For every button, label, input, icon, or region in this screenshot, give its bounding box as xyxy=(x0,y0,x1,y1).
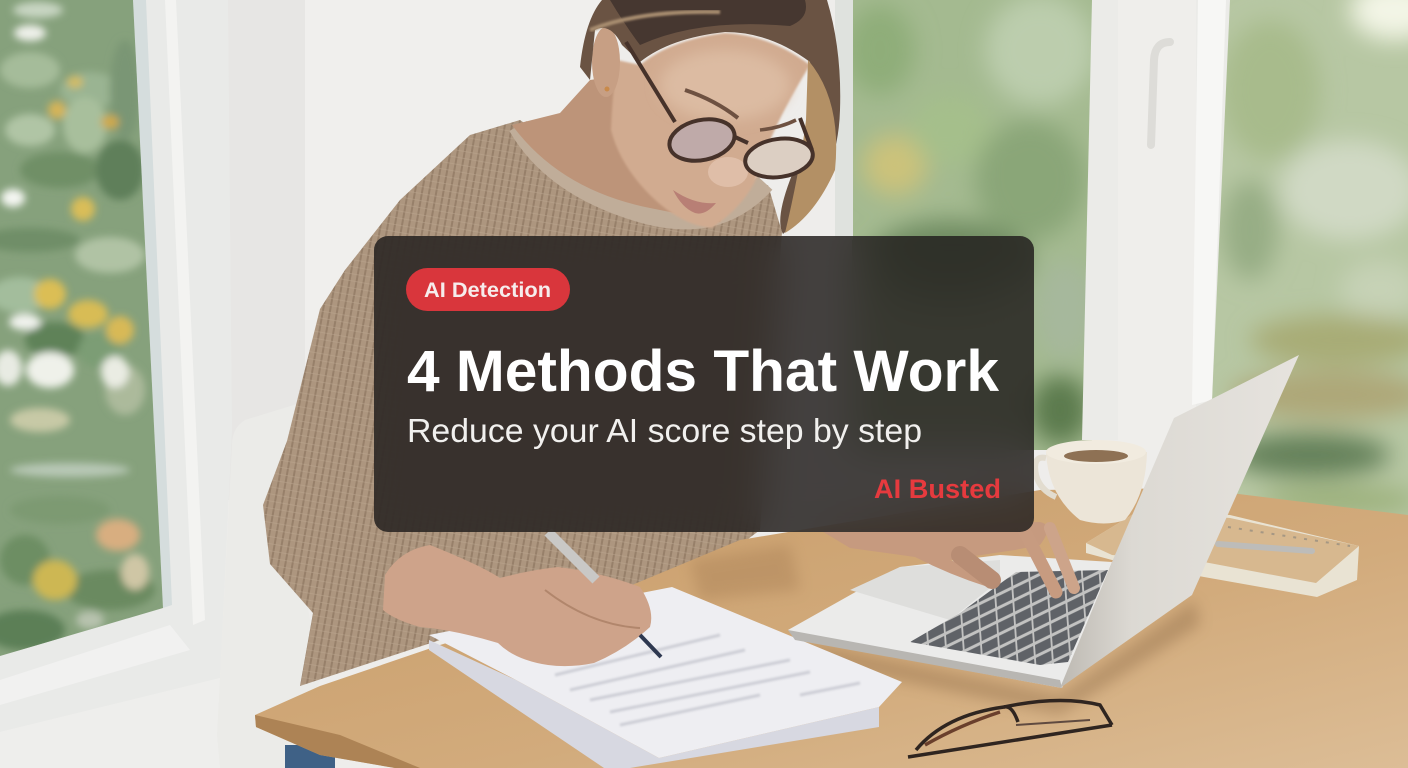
jeans xyxy=(285,745,335,768)
eyebrows, nose and lips xyxy=(685,90,738,118)
notebook xyxy=(1086,510,1359,597)
badge: AI Detection xyxy=(406,268,570,311)
ear xyxy=(592,27,620,97)
hair xyxy=(580,0,840,234)
pen on notebook xyxy=(1218,544,1312,551)
badge: AI Detection: AI Detection xyxy=(424,278,551,302)
sweater collar xyxy=(518,126,765,219)
table shadows xyxy=(690,545,1200,715)
laptop xyxy=(788,355,1299,688)
window handle xyxy=(1151,42,1170,145)
middle window foliage xyxy=(845,0,1095,450)
window frames right xyxy=(835,0,1230,450)
sweater xyxy=(263,120,782,686)
writing hand and forearm xyxy=(383,545,651,666)
coffee cup xyxy=(1035,440,1147,524)
right window foliage xyxy=(1200,0,1408,520)
laptop lid xyxy=(1060,355,1299,688)
table xyxy=(255,488,1408,768)
left window foliage xyxy=(0,0,170,670)
typing hand xyxy=(820,522,1074,592)
pen xyxy=(548,532,661,657)
glasses on the table xyxy=(908,700,1112,757)
title: 4 Methods That Work xyxy=(407,339,1000,404)
overlay panel xyxy=(374,236,1034,532)
sheaf of papers xyxy=(429,587,902,768)
subtitle: Reduce your AI score step by step xyxy=(407,412,922,449)
chair xyxy=(217,404,320,768)
laptop keyboard xyxy=(910,570,1108,665)
brand: AI Busted: AI Busted xyxy=(874,474,1001,504)
left window frame xyxy=(0,0,232,768)
neck and face xyxy=(512,27,810,228)
eyeglasses on face xyxy=(626,42,815,182)
